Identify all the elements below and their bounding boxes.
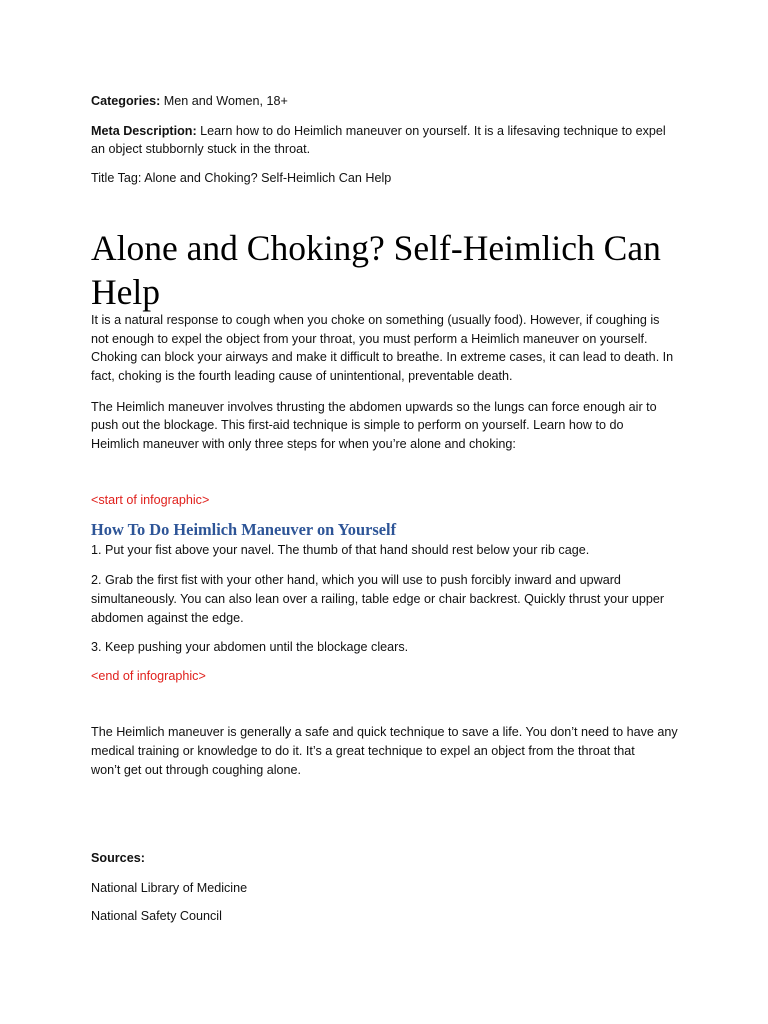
sources [91, 851, 247, 923]
meta block [91, 94, 666, 185]
step 3: 3. Keep pushing your abdomen until the blockage clears. [91, 640, 408, 654]
closing paragraph: medical training or knowledge to do it. It’s a great technique to expel an object from the throat that [91, 744, 635, 758]
second paragraph: Heimlich maneuver with only three steps for when you’re alone and choking: [91, 437, 516, 451]
closing paragraph: The Heimlich maneuver is generally a safe and quick technique to save a life. You don’t need to have any [91, 725, 678, 739]
meta description: an object stubbornly stuck in the throat. [91, 142, 310, 156]
step 2: 2. Grab the first fist with your other hand, which you will use to push forcibly inward and upward [91, 573, 621, 587]
title tag: Title Tag: Alone and Choking? Self-Heimlich Can Help [91, 171, 391, 185]
title: Help [91, 272, 160, 312]
end marker: <end of infographic> [91, 669, 206, 683]
step 2 [91, 573, 664, 625]
step 2: simultaneously. You can also lean over a railing, table edge or chair backrest. Quickly thrust your upper [91, 592, 664, 606]
second paragraph: push out the blockage. This first-aid technique is simple to perform on yourself. Learn how to do [91, 418, 624, 432]
intro paragraph: It is a natural response to cough when you choke on something (usually food). However, if coughing is [91, 313, 659, 327]
second paragraph [91, 400, 657, 451]
sources: National Safety Council [91, 909, 222, 923]
title [91, 228, 661, 312]
step 2: abdomen against the edge. [91, 611, 244, 625]
sources: National Library of Medicine [91, 881, 247, 895]
meta description [91, 124, 666, 156]
intro paragraph: fact, choking is the fourth leading cause of unintentional, preventable death. [91, 369, 512, 383]
intro paragraph: not enough to expel the object from your throat, you must perform a Heimlich maneuver on yourself. [91, 332, 648, 346]
closing paragraph: won’t get out through coughing alone. [91, 763, 301, 777]
second paragraph: The Heimlich maneuver involves thrusting the abdomen upwards so the lungs can force enough air to [91, 400, 657, 414]
meta description: Meta Description: Learn how to do Heimlich maneuver on yourself. It is a lifesaving technique to expel [91, 124, 666, 138]
step 1: 1. Put your fist above your navel. The thumb of that hand should rest below your rib cage. [91, 543, 589, 557]
categories: Categories: Men and Women, 18+ [91, 94, 288, 108]
closing paragraph [91, 725, 678, 777]
intro paragraph [91, 313, 673, 383]
title: Alone and Choking? Self-Heimlich Can [91, 228, 661, 268]
subheading: How To Do Heimlich Maneuver on Yourself [91, 520, 396, 539]
sources: Sources: [91, 851, 145, 865]
intro paragraph: Choking can block your airways and make it difficult to breathe. In extreme cases, it can lead to death. In [91, 350, 673, 364]
start marker: <start of infographic> [91, 493, 209, 507]
